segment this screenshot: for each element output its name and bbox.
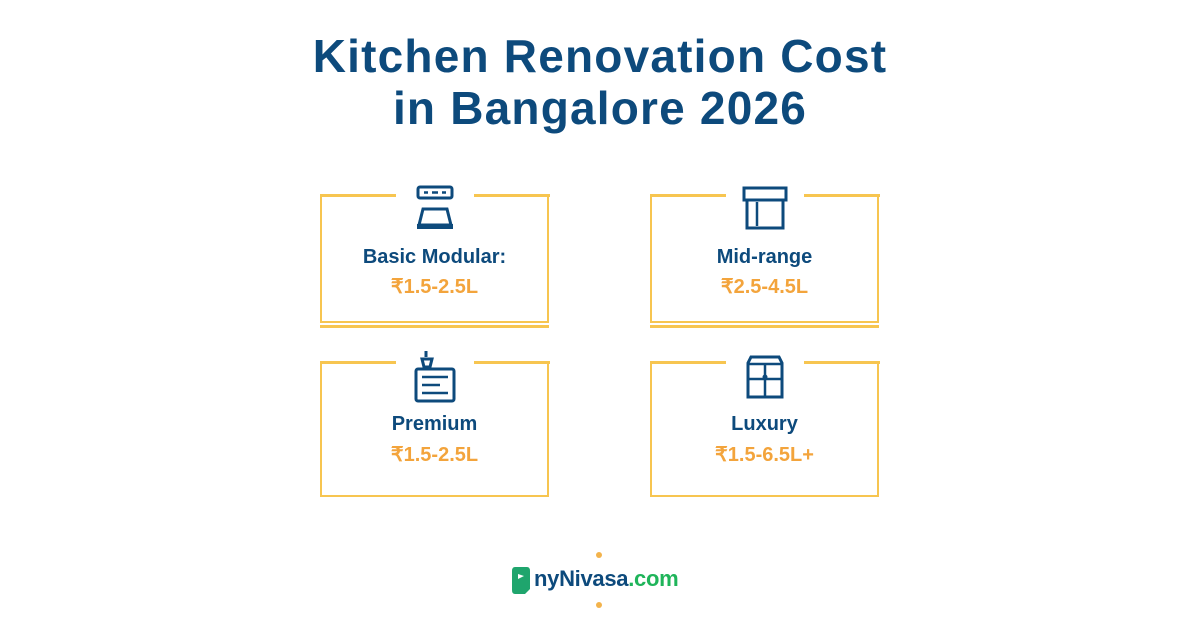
- panel: mid-range: ₹2.5-4.5L: [721, 276, 808, 298]
- icon: stove: [414, 351, 456, 402]
- panel: luxury: [650, 363, 879, 497]
- panel: luxury: Luxury: [731, 413, 798, 435]
- icon: hood: [416, 186, 454, 229]
- panel: basic modular: ₹1.5-2.5L: [391, 276, 478, 298]
- panel: luxury: ₹1.5-6.5L+: [715, 444, 814, 466]
- decorative dots: [596, 552, 602, 558]
- panel: premium: ₹1.5-2.5L: [391, 444, 478, 466]
- panel: mid-range: Mid-range: [717, 246, 812, 268]
- icon: wardrobe: [746, 356, 784, 398]
- title: in Bangalore 2026: [393, 82, 807, 134]
- icon: logo pin: [512, 567, 530, 594]
- panel: basic modular: [320, 196, 549, 323]
- title: Kitchen Renovation Cost: [313, 30, 887, 82]
- panel: basic modular: Basic Modular:: [363, 246, 506, 268]
- panel: premium: Premium: [392, 413, 477, 435]
- panel: mid-range: [650, 196, 879, 323]
- logo: nyNivasa.com: [534, 566, 678, 591]
- icon: cabinet: [742, 186, 788, 230]
- title: [313, 30, 887, 134]
- panel: premium: [320, 363, 549, 497]
